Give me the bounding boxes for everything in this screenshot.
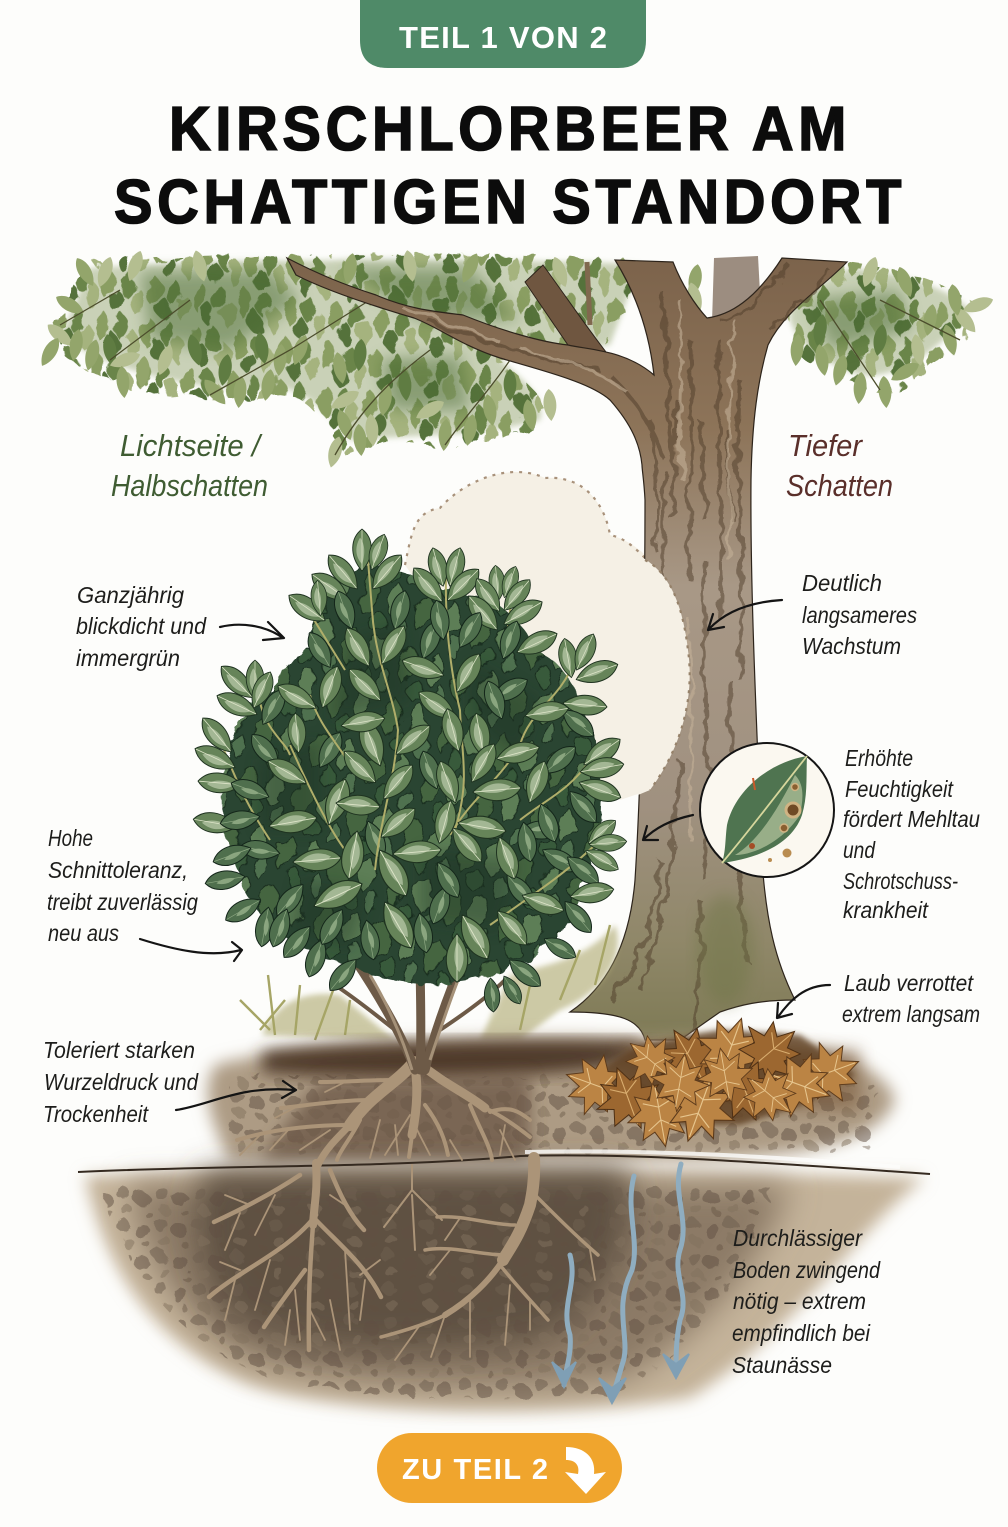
left drooping leaves xyxy=(36,249,705,469)
callout: slower growth: Wachstum xyxy=(802,633,901,659)
title: SCHATTIGEN STANDORT xyxy=(114,168,906,237)
stems of the shrub branches xyxy=(222,560,600,925)
callout: mildew and shot-hole disease: fördert Mehltau xyxy=(843,806,980,832)
callout: pruning tolerance xyxy=(47,825,242,961)
callout: mildew and shot-hole disease: und xyxy=(843,837,876,863)
callout: mildew and shot-hole disease: Erhöhte xyxy=(845,745,913,771)
callout: permeable soil: Boden zwingend xyxy=(733,1257,881,1283)
thin twig xyxy=(587,262,590,325)
callout: pruning tolerance: treibt zuverlässig xyxy=(47,889,198,915)
callout: mildew and shot-hole disease: krankheit xyxy=(843,897,929,923)
lower soil cross-section xyxy=(78,1151,930,1411)
outer top leaves xyxy=(283,529,561,662)
shaded ghost shrub outline xyxy=(405,472,690,800)
callout: pruning tolerance: neu aus xyxy=(48,920,119,946)
callout: mildew and shot-hole disease: Feuchtigkeit xyxy=(845,776,954,802)
zone heading: deep shade: Tiefer xyxy=(788,428,864,463)
outer right leaves xyxy=(483,630,627,1013)
callout: mildew and shot-hole disease xyxy=(643,745,980,923)
darker foreground patches xyxy=(260,620,540,950)
outer left leaves xyxy=(191,660,363,996)
title: KIRSCHLORBEER AM xyxy=(169,95,851,164)
middle thin root xyxy=(384,1165,442,1250)
callout: pruning tolerance: Schnittoleranz, xyxy=(48,857,188,883)
callout: pruning tolerance: Hohe xyxy=(48,825,93,851)
zone heading: light side xyxy=(111,428,268,503)
dense crown mass xyxy=(222,568,602,984)
cherry laurel shrub xyxy=(191,529,627,1070)
water drainage arrows xyxy=(552,1164,689,1403)
shrub stems xyxy=(335,950,505,1070)
callout: root pressure: Toleriert starken xyxy=(43,1037,195,1063)
zone heading: deep shade: Schatten xyxy=(786,468,893,503)
icon: curved down arrow xyxy=(565,1447,606,1494)
rear trunk xyxy=(712,256,762,330)
callout: slower growth: langsameres xyxy=(802,602,917,628)
callout: permeable soil: Durchlässiger xyxy=(733,1225,863,1251)
callout: slow leaf decay: extrem langsam xyxy=(842,1001,980,1027)
callout: slow leaf decay xyxy=(777,970,980,1027)
upper branch xyxy=(525,265,606,352)
callout: root pressure xyxy=(43,1037,296,1127)
top badge: Teil 1 von 2 xyxy=(360,0,646,68)
callout: permeable soil: Staunässe xyxy=(732,1352,832,1378)
upper root system xyxy=(237,1062,530,1165)
callout: root pressure: Wurzeldruck und xyxy=(44,1069,199,1095)
inset circle: diseased leaf xyxy=(700,743,834,877)
tree canopy foliage xyxy=(36,249,995,469)
callout: root pressure: Trockenheit xyxy=(43,1101,149,1127)
pale light overlay on trunk xyxy=(638,556,690,795)
callout: permeable soil: nötig – extrem xyxy=(733,1288,866,1314)
lower left root system xyxy=(209,1163,381,1350)
top badge: Teil 1 von 2: TEIL 1 VON 2 xyxy=(399,20,607,55)
callout: evergreen xyxy=(76,582,284,671)
callout: permeable soil: empfindlich bei xyxy=(732,1320,871,1346)
zone heading: deep shade xyxy=(786,428,893,503)
callout: slower growth xyxy=(708,570,917,659)
moss xyxy=(697,895,753,1005)
upper soil layer xyxy=(208,1037,895,1162)
callout: evergreen: Ganzjährig xyxy=(77,582,184,608)
pile of decaying leaves xyxy=(556,1006,869,1153)
button: Zu Teil 2: ZU TEIL 2 xyxy=(402,1454,548,1486)
callout: evergreen: immergrün xyxy=(76,645,180,671)
roots xyxy=(209,1062,598,1360)
right drooping leaves xyxy=(789,255,995,408)
callout: mildew and shot-hole disease: Schrotschuss- xyxy=(843,868,958,894)
twigs xyxy=(60,290,960,455)
inner highlighted leaves xyxy=(263,621,570,982)
soil surface line xyxy=(78,1155,930,1174)
callout: slow leaf decay: Laub verrottet xyxy=(844,970,974,996)
zone heading: light side: Lichtseite / xyxy=(120,428,263,463)
callout: slower growth: Deutlich xyxy=(802,570,882,596)
trunk and main branch silhouette xyxy=(287,258,847,1040)
right root system xyxy=(381,1158,598,1360)
tree trunk xyxy=(287,256,847,1040)
title xyxy=(114,95,906,237)
callout: permeable soil xyxy=(732,1225,881,1378)
bark texture xyxy=(430,265,830,1030)
zone heading: light side: Halbschatten xyxy=(111,468,268,503)
grass tufts xyxy=(240,925,618,1040)
button: Zu Teil 2 xyxy=(377,1433,622,1503)
callout: evergreen: blickdicht und xyxy=(76,613,207,639)
filler leaves xyxy=(239,618,582,961)
